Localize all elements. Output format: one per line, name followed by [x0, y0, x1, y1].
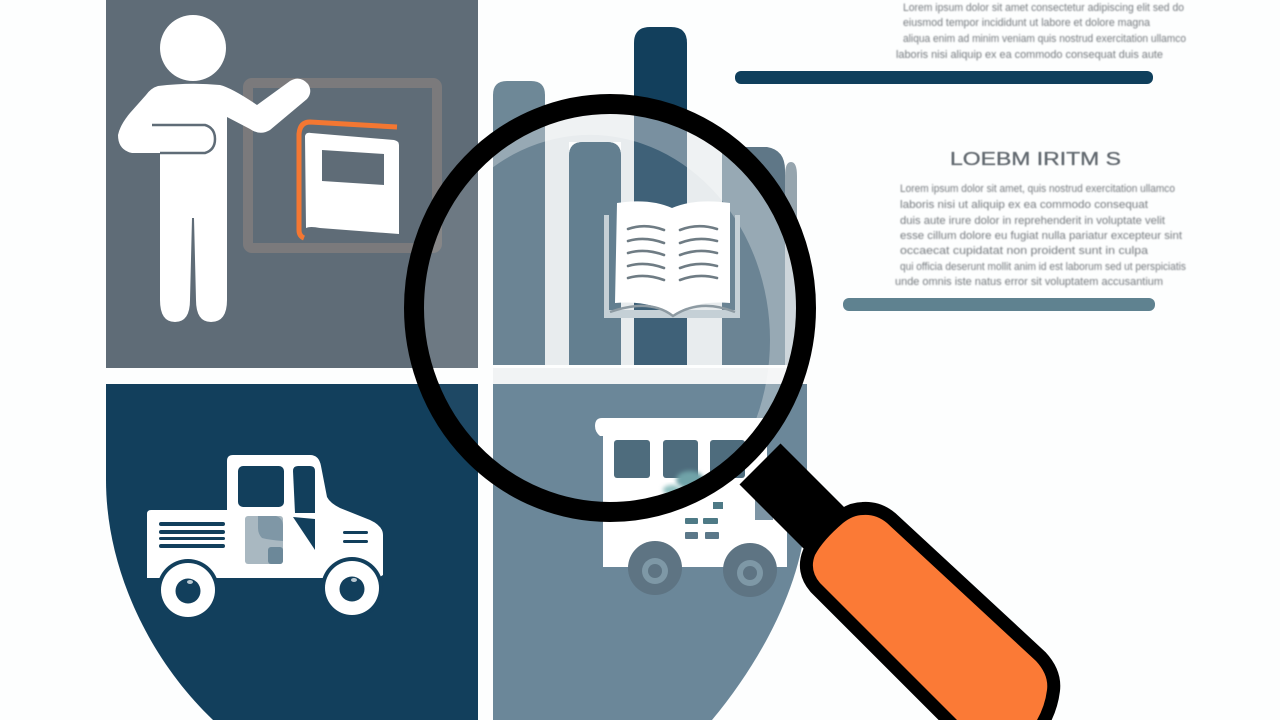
bar: navy rule — [735, 71, 1153, 84]
panel: bottom-right bus panel — [493, 384, 807, 720]
text block: lower paragraph: esse cillum dolore eu fugiat nulla pariatur excepteur sint — [900, 230, 1182, 242]
icon: pickup truck — [147, 455, 383, 621]
icon: presentation frame — [248, 83, 437, 248]
text block: lower paragraph — [895, 183, 1186, 288]
text block: lower paragraph: occaecat cupidatat non proident sunt in culpa — [900, 245, 1149, 257]
text block: lower paragraph: duis aute irure dolor in reprehenderit in voluptate velit — [900, 215, 1165, 227]
icon: magnifying glass — [414, 104, 1047, 720]
panel: bottom-left truck panel — [106, 384, 478, 720]
icon: orange book — [299, 122, 399, 238]
heading: LOEBM IRITM S — [950, 149, 1121, 169]
text block: lower paragraph: laboris nisi ut aliquip ex ea commodo consequat — [900, 199, 1148, 211]
text block: lower paragraph: unde omnis iste natus error sit voluptatem accusantium — [895, 276, 1163, 288]
chart: top-right bars — [493, 27, 797, 365]
bar: teal rule — [843, 298, 1155, 311]
icon: open book — [604, 201, 740, 318]
text block: top paragraph: aliqua enim ad minim veniam quis nostrud exercitation ullamco — [903, 33, 1186, 45]
text block: lower paragraph: Lorem ipsum dolor sit amet, quis nostrud exercitation ullamco — [900, 183, 1175, 195]
panel: top-left person panel — [106, 0, 478, 368]
icon: bus — [595, 418, 787, 597]
text block: top paragraph: laboris nisi aliquip ex ea commodo consequat duis aute — [896, 49, 1163, 61]
icon: presenter figure — [118, 15, 310, 322]
lens glass — [106, 60, 840, 545]
text block: top paragraph — [896, 2, 1186, 61]
text block: lower paragraph: qui officia deserunt mollit anim id est laborum sed ut perspiciatis — [900, 261, 1186, 273]
text block: top paragraph: Lorem ipsum dolor sit amet consectetur adipiscing elit sed do — [903, 2, 1184, 14]
text block: top paragraph: eiusmod tempor incididunt ut labore et dolore magna — [903, 17, 1151, 29]
